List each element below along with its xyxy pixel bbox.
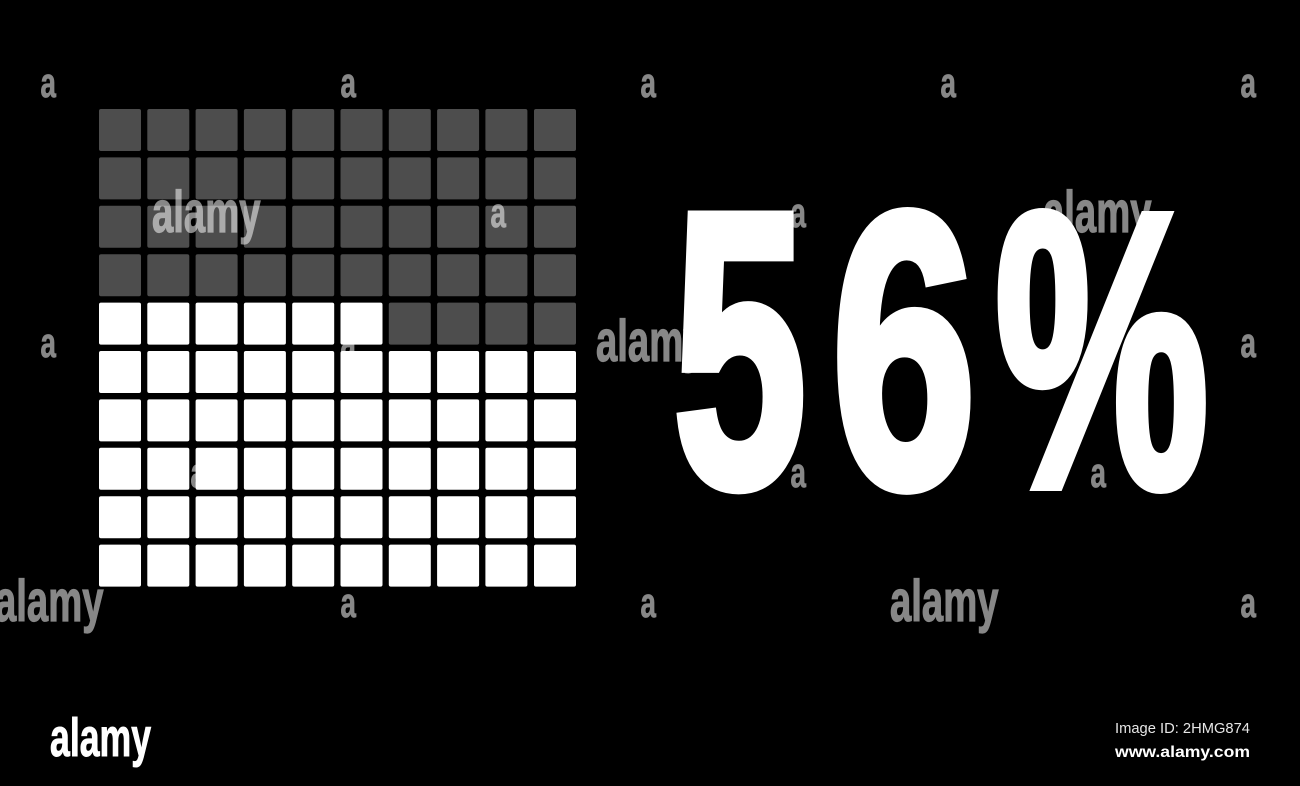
big percentage value: %: [995, 131, 1209, 569]
unfilled cells: top four rows and end of fifth row: [99, 109, 576, 345]
watermarks: repeated small marks: a: [490, 189, 507, 236]
watermarks: repeated small marks: a: [790, 449, 807, 496]
watermarks: large wordmarks: alamy: [596, 310, 705, 374]
watermarks: repeated small marks: a: [190, 449, 207, 496]
logo: alamy: alamy: [50, 708, 151, 768]
website url: www.alamy.com: [1114, 744, 1250, 761]
watermarks: repeated small marks: a: [640, 59, 657, 106]
watermarks: large wordmarks: alamy: [152, 181, 261, 245]
image id: Image ID: 2HMG874: [1115, 721, 1250, 737]
watermarks: repeated small marks: a: [40, 319, 57, 366]
watermarks: repeated small marks: a: [1240, 319, 1257, 366]
watermarks: large wordmarks: alamy: [890, 570, 999, 634]
watermarks: repeated small marks: a: [1240, 579, 1257, 626]
big percentage value: 5: [673, 131, 807, 568]
big percentage value: [673, 131, 1209, 569]
watermarks: repeated small marks: a: [640, 579, 657, 626]
watermarks: repeated small marks: [40, 59, 1257, 626]
watermarks: repeated small marks: a: [1090, 449, 1107, 496]
watermarks: large wordmarks: [0, 181, 1152, 634]
watermarks: repeated small marks: a: [340, 319, 357, 366]
filled cells: 56 white squares: [99, 303, 576, 587]
watermarks: repeated small marks: a: [940, 59, 957, 106]
watermarks: repeated small marks: a: [340, 579, 357, 626]
watermarks: repeated small marks: a: [790, 189, 807, 236]
watermarks: large wordmarks: alamy: [1043, 181, 1152, 245]
waffle chart: 56 of 100 cells filled: [99, 109, 576, 587]
watermarks: repeated small marks: a: [340, 59, 357, 106]
watermarks: repeated small marks: a: [40, 59, 57, 106]
watermarks: repeated small marks: a: [1240, 59, 1257, 106]
big percentage value: 6: [831, 133, 976, 569]
